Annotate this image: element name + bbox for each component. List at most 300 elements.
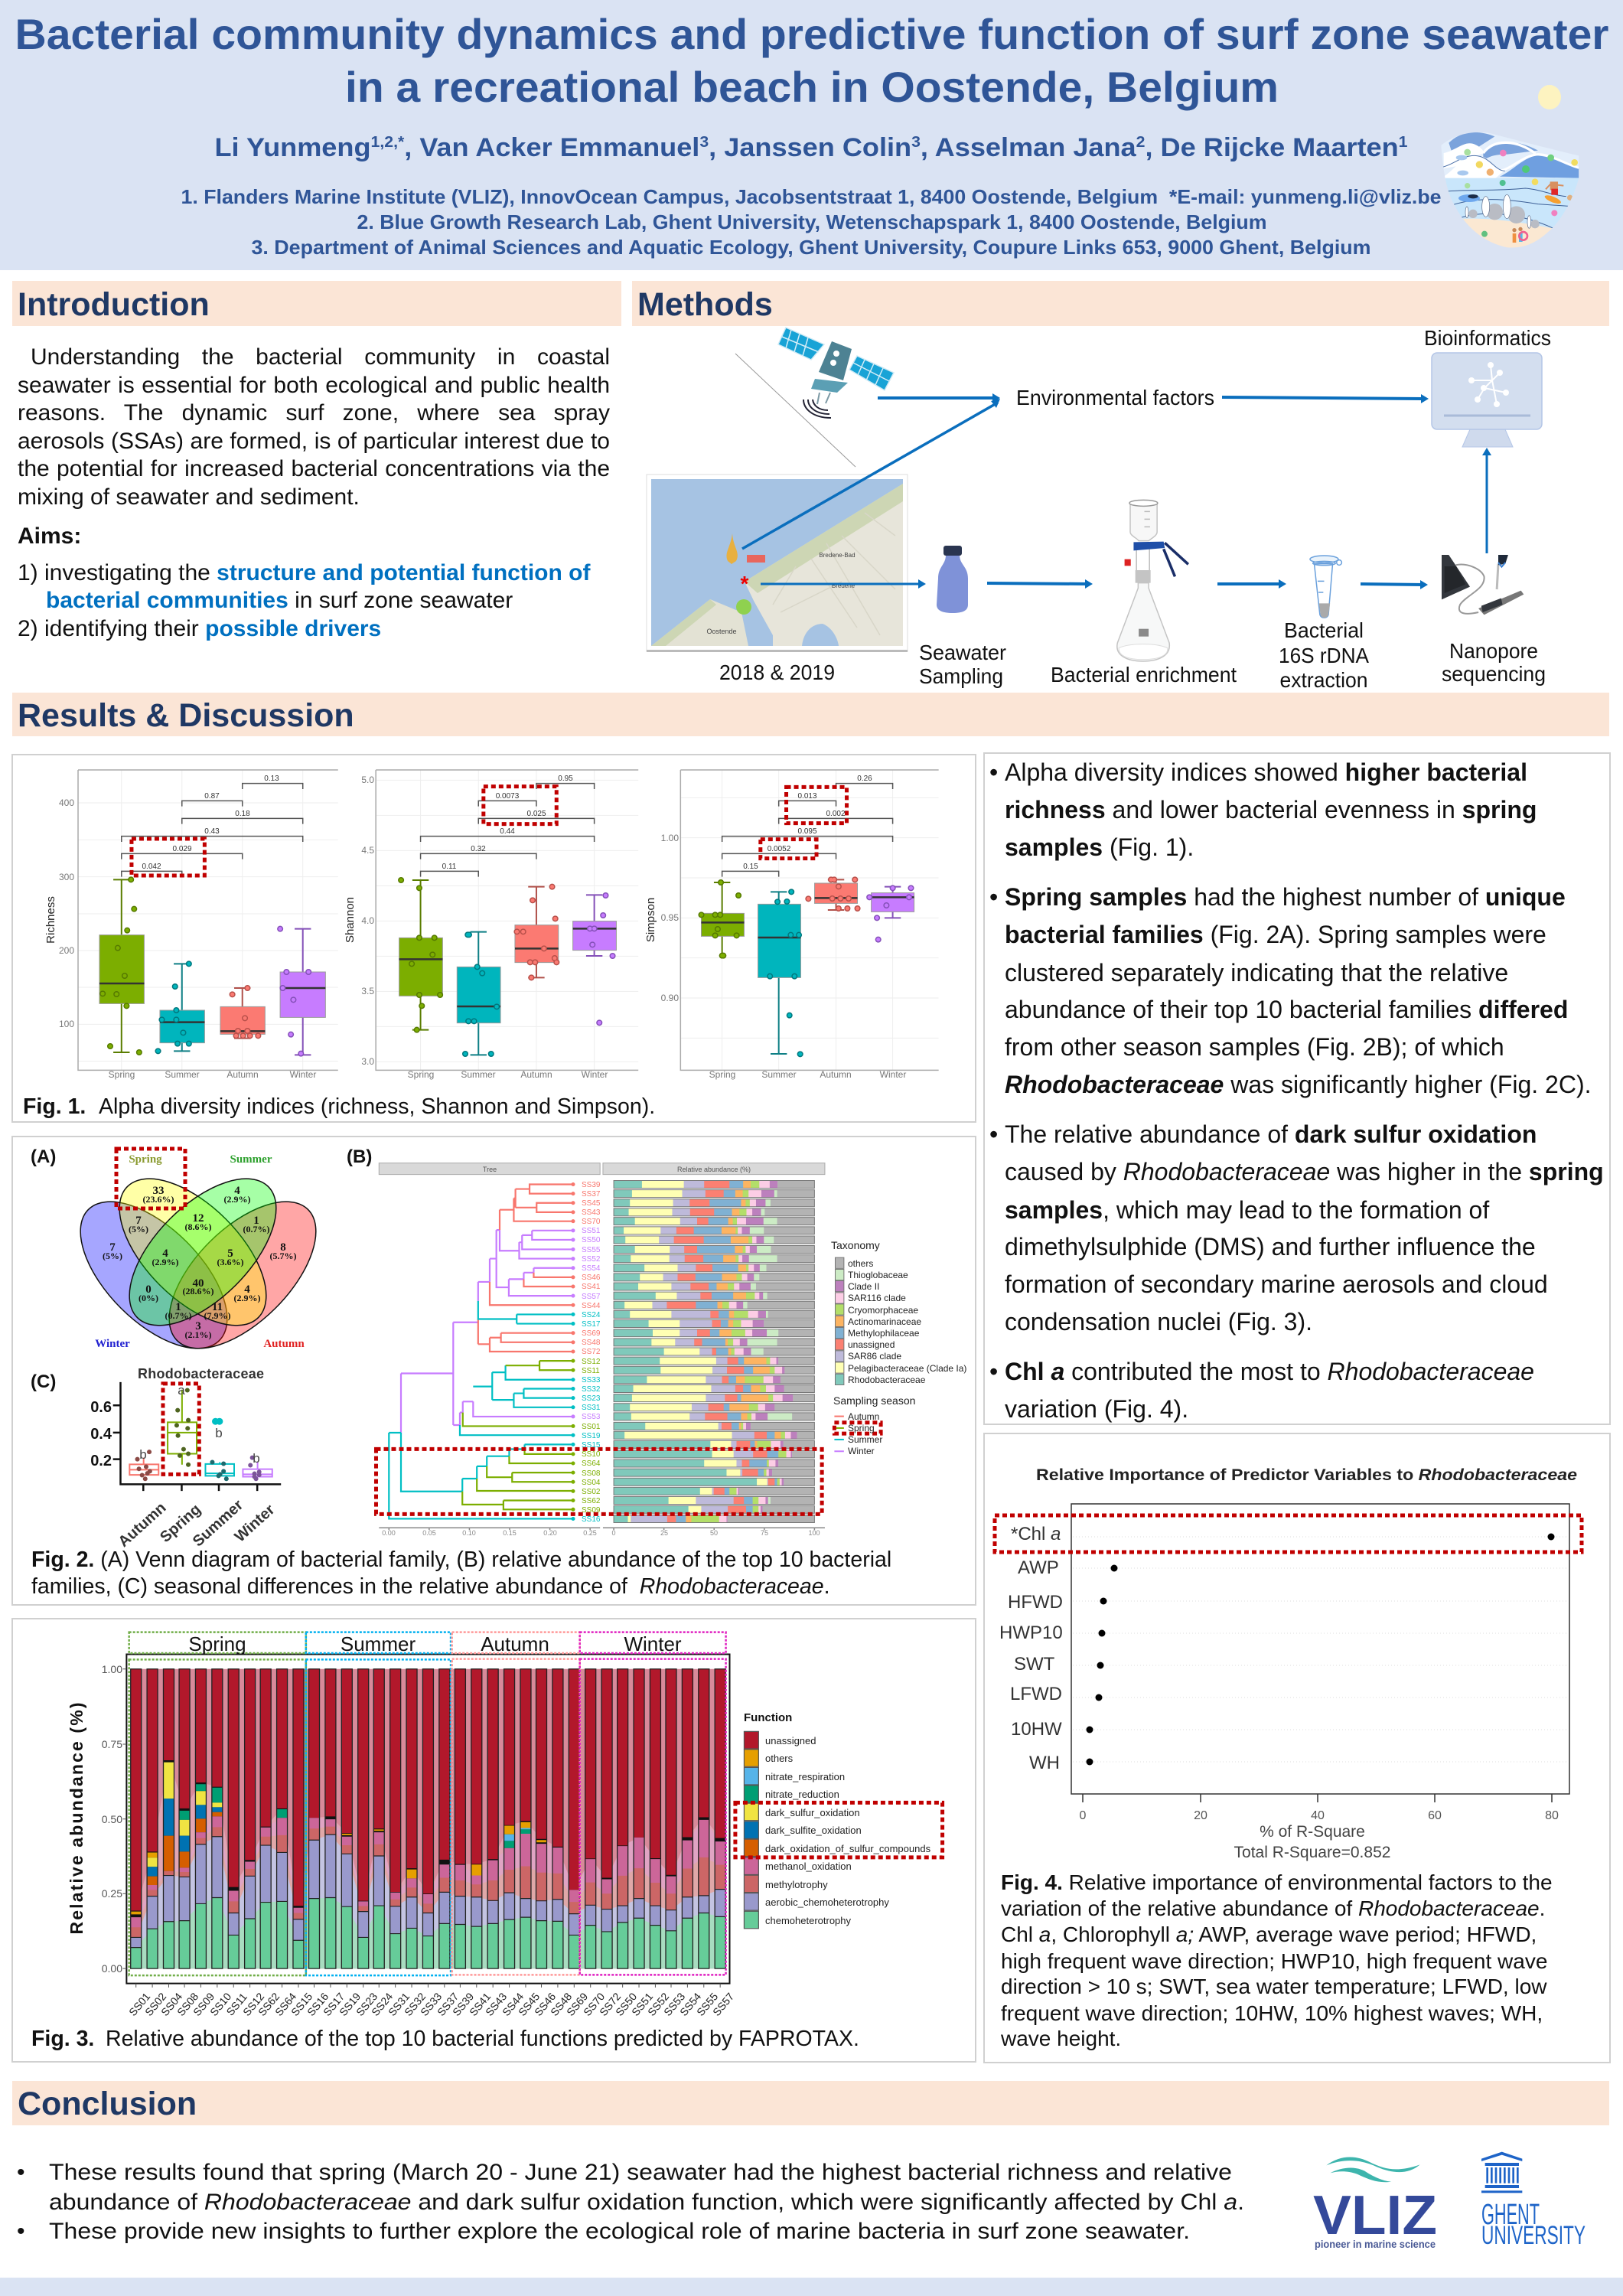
- caption figure 4: wave height.: [1000, 2027, 1121, 2050]
- icon: satellite: [778, 328, 894, 418]
- p-value labels: 0.26: [857, 775, 872, 783]
- axis tick labels: 3.5: [361, 986, 374, 996]
- dendrogram and stacked bars: SS19: [582, 1432, 601, 1440]
- p-value labels: 0.095: [797, 827, 817, 836]
- season labels: [188, 1632, 682, 1655]
- axis tick labels: 400: [59, 797, 74, 808]
- sample labels: SS33: [418, 1990, 444, 2018]
- axis tick labels: Spring: [408, 1069, 434, 1080]
- venn diagram: (5%): [129, 1224, 148, 1234]
- p-value labels: 0.025: [526, 810, 546, 818]
- heading: Introduction: Introduction: [18, 286, 210, 323]
- methods diagram: [647, 326, 1551, 692]
- label: environmental factors: Environmental factors: [1016, 386, 1214, 409]
- label: DNA extraction: 16S rDNA: [1279, 644, 1369, 667]
- dendrogram and stacked bars: SS72: [582, 1348, 601, 1356]
- p-value labels: 0.042: [142, 863, 161, 871]
- caption figure 2: families, (C) seasonal differences in the relative abundance of Rhodobacteraceae.: [31, 1574, 830, 1599]
- authors: 1: [1399, 134, 1408, 151]
- boxplots: [78, 770, 939, 1070]
- label: seawater sampling: [919, 641, 1006, 688]
- axis tick labels: [59, 775, 906, 1080]
- sample labels: SS69: [564, 1990, 590, 2018]
- label: seawater sampling: Sampling: [919, 664, 1003, 688]
- p-value labels: 0.95: [558, 775, 573, 783]
- arrow: map to environmental factors: [742, 399, 1000, 549]
- label: 2018 and 2019: 2018 & 2019: [719, 660, 835, 684]
- dendrogram and stacked bars: 0.20: [543, 1529, 557, 1537]
- sample labels: SS51: [629, 1990, 655, 2018]
- logo: Ghent University: [1481, 2152, 1586, 2250]
- p-value labels: 0.87: [204, 792, 220, 801]
- sample labels: SS31: [386, 1990, 412, 2018]
- legend: taxonomy and season: Thioglobaceae: [848, 1270, 908, 1280]
- legend: function: unassigned: [765, 1735, 816, 1746]
- authors: , De Rijcke Maarten: [1145, 133, 1399, 162]
- arrows: [761, 393, 1491, 589]
- sample labels: SS57: [710, 1990, 736, 2018]
- aims text: 2) identifying their possible drivers: [18, 616, 381, 641]
- dendrogram and stacked bars: SS57: [582, 1293, 601, 1301]
- conclusion bullets: •: [17, 2160, 25, 2185]
- dendrogram and stacked bars: SS15: [582, 1441, 601, 1450]
- dendrogram and stacked bars: 25: [660, 1529, 668, 1537]
- season labels: Autumn: [481, 1632, 549, 1655]
- panel: right discussion text: abundance of their top 10 bacterial families differed: [1005, 996, 1568, 1023]
- icon: nanopore device: [1442, 555, 1524, 615]
- sample labels: SS54: [677, 1990, 703, 2018]
- dendrogram and stacked bars: SS51: [582, 1227, 601, 1235]
- venn diagram: [55, 1149, 341, 1374]
- dendrogram and stacked bars: [376, 1163, 966, 1537]
- panel label B: (B): [347, 1146, 372, 1167]
- caption figure 4: [1000, 1870, 1553, 2050]
- axis tick labels: 3.0: [361, 1056, 374, 1067]
- dot chart: 20: [1194, 1809, 1207, 1822]
- dendrogram and stacked bars: SS64: [582, 1459, 601, 1468]
- legend: taxonomy and season: others: [848, 1258, 873, 1269]
- label: DNA extraction: Bacterial: [1284, 618, 1364, 642]
- sample labels: SS12: [240, 1990, 266, 2018]
- legend: taxonomy and season: Winter: [848, 1446, 875, 1456]
- legend: function: Function: [744, 1711, 792, 1724]
- dendrogram and stacked bars: SS54: [582, 1264, 601, 1273]
- panel: right discussion text: caused by Rhodobacteraceae was higher in the spring: [1005, 1158, 1604, 1186]
- footer band: [0, 2278, 1623, 2296]
- axis tick labels: Autumn: [520, 1069, 552, 1080]
- authors: Li Yunmeng: [214, 133, 362, 162]
- legend: taxonomy and season: [831, 1239, 966, 1456]
- dendrogram and stacked bars: SS55: [582, 1246, 601, 1254]
- label: bacterial enrichment: Bacterial enrichment: [1051, 663, 1237, 687]
- legend: taxonomy and season: Summer: [848, 1434, 882, 1445]
- sample labels: SS23: [354, 1990, 380, 2018]
- dendrogram and stacked bars: SS39: [582, 1181, 601, 1189]
- legend: function: nitrate_reduction: [765, 1789, 839, 1800]
- caption figure 4: Chl a, Chlorophyll a; AWP, average wave period; HFWD,: [1001, 1923, 1537, 1946]
- sample labels: SS17: [321, 1990, 347, 2018]
- authors: , Van Acker Emmanuel: [404, 133, 699, 162]
- caption figure 4: high frequent wave direction; HWP10, high frequent wave: [1001, 1949, 1547, 1973]
- axis tick labels: Spring: [109, 1069, 135, 1080]
- legend: taxonomy and season: Clade II: [848, 1281, 879, 1292]
- sample labels: SS64: [272, 1990, 298, 2018]
- legend: taxonomy and season: Actinomarinaceae: [848, 1316, 921, 1327]
- y axis: 0.50: [102, 1813, 122, 1825]
- axis tick labels: Winter: [582, 1069, 608, 1080]
- venn diagram: 0: [145, 1283, 152, 1296]
- Rhodobacteraceae boxplot: 0.4: [90, 1426, 112, 1443]
- sample labels: SS62: [256, 1990, 282, 2018]
- caption figure 3: Relative abundance of the top 10 bacterial functions predicted by FAPROTAX.: [106, 2027, 859, 2051]
- dot chart: [995, 1504, 1582, 1861]
- sample labels: SS45: [516, 1990, 542, 2018]
- venn diagram: (8.6%): [185, 1221, 211, 1232]
- y axis: 1.00: [102, 1663, 122, 1675]
- p-value labels: 0.43: [204, 827, 220, 836]
- p-value labels: 0.15: [743, 863, 758, 871]
- Rhodobacteraceae boxplot: Autumn: [116, 1499, 169, 1551]
- season labels: Summer: [341, 1632, 416, 1655]
- icon: sun: [1538, 85, 1561, 109]
- Rhodobacteraceae boxplot: b: [253, 1451, 260, 1466]
- sample labels: SS19: [337, 1990, 363, 2018]
- axis tick labels: 4.5: [361, 845, 374, 856]
- caption figure 1: Fig. 1.: [23, 1094, 86, 1119]
- title: Bacterial community dynamics and predictive function of surf zone seawater: [15, 11, 1608, 58]
- axis titles: Shannon: [344, 897, 357, 943]
- dot chart: HFWD: [1008, 1592, 1063, 1613]
- dendrogram and stacked bars: 0.25: [583, 1529, 597, 1537]
- y axis: Relative abundance (%): [67, 1702, 86, 1935]
- chart title: Relative Importance of Predictor Variables to Rhodobacteraceae: [1036, 1466, 1577, 1484]
- p-value labels: 0.11: [442, 863, 457, 871]
- conclusion bullets: These provide new insights to further explore the ecological role of marine bacteria in surf zone seawater.: [49, 2219, 1190, 2244]
- axis tick labels: Summer: [761, 1069, 797, 1080]
- icon: tube: [1310, 556, 1341, 618]
- dendrogram and stacked bars: 50: [710, 1529, 718, 1537]
- label: nanopore sequencing: [1442, 639, 1546, 686]
- logo: VLIZ: [1313, 2157, 1437, 2250]
- dendrogram and stacked bars: SS16: [582, 1515, 601, 1524]
- heading: Introduction: [12, 281, 621, 326]
- panel: right discussion text: condensation nuclei (Fig. 3).: [1005, 1308, 1312, 1336]
- sample labels: SS48: [548, 1990, 574, 2018]
- legend: taxonomy and season: Pelagibacteraceae (Clade Ia): [848, 1363, 966, 1374]
- dendrogram and stacked bars: SS53: [582, 1413, 601, 1421]
- panel: right discussion text: samples, which may lead to the formation of: [1005, 1196, 1489, 1224]
- dendrogram and stacked bars: SS02: [582, 1488, 601, 1496]
- sample labels: SS52: [645, 1990, 671, 2018]
- venn diagram: (7.9%): [204, 1310, 231, 1321]
- panel: right discussion text: from other season samples (Fig. 2B); of which: [1005, 1033, 1504, 1061]
- Rhodobacteraceae boxplot: [90, 1366, 281, 1551]
- Rhodobacteraceae boxplot: Winter: [232, 1501, 279, 1545]
- panel: right discussion text: dimethylsulphide (DMS) and further influence the: [1005, 1233, 1536, 1261]
- p-value labels: 0.13: [264, 775, 279, 783]
- caption figure 2: [31, 1548, 891, 1599]
- sample labels: SS41: [467, 1990, 493, 2018]
- Rhodobacteraceae boxplot: b: [215, 1426, 223, 1440]
- dendrogram and stacked bars: SS24: [582, 1311, 601, 1319]
- legend: taxonomy and season: Cryomorphaceae: [848, 1305, 918, 1316]
- panel: figure 2: [12, 1137, 976, 1605]
- Rhodobacteraceae boxplot: Summer: [190, 1496, 246, 1550]
- venn diagram: (2.9%): [234, 1293, 260, 1303]
- axis tick labels: 5.0: [361, 775, 374, 785]
- axis tick labels: 200: [59, 945, 74, 956]
- axis tick labels: Autumn: [820, 1069, 852, 1080]
- legend: taxonomy and season: Autumn: [848, 1411, 879, 1422]
- venn diagram: 7: [135, 1215, 142, 1227]
- dendrogram and stacked bars: SS52: [582, 1255, 601, 1264]
- Rhodobacteraceae boxplot: 0.2: [90, 1453, 112, 1469]
- legend: function: [744, 1711, 931, 1926]
- Rhodobacteraceae boxplot: a: [178, 1383, 185, 1397]
- dot chart: LFWD: [1010, 1684, 1062, 1704]
- caption figure 2: Fig. 2. (A) Venn diagram of bacterial family, (B) relative abundance of the top 10 bacterial: [31, 1548, 891, 1572]
- affiliations: 3. Department of Animal Sciences and Aquatic Ecology, Ghent University, Coupure Links 653, 9000 Ghent, Belgium: [251, 236, 1371, 259]
- caption figure 4: frequent wave direction; 10HW, 10% highest waves; WH,: [1001, 2001, 1543, 2025]
- dendrogram and stacked bars: SS44: [582, 1302, 601, 1310]
- dot chart: 10HW: [1011, 1719, 1062, 1740]
- axis tick labels: 300: [59, 872, 74, 882]
- axis tick labels: Spring: [709, 1069, 735, 1080]
- dendrogram and stacked bars: SS23: [582, 1394, 601, 1403]
- sample labels: SS46: [532, 1990, 558, 2018]
- dot chart: 80: [1545, 1809, 1559, 1822]
- axis tick labels: 100: [59, 1019, 74, 1029]
- panel: right discussion text: The relative abundance of dark sulfur oxidation: [1005, 1120, 1537, 1148]
- legend: taxonomy and season: Methylophilaceae: [848, 1328, 920, 1339]
- p-value labels: 0.18: [235, 810, 250, 818]
- dendrogram and stacked bars: 0.05: [422, 1529, 436, 1537]
- dendrogram and stacked bars: SS62: [582, 1497, 601, 1505]
- map of sampling site: [647, 475, 908, 652]
- sample labels: SS50: [613, 1990, 639, 2018]
- venn diagram: 40: [193, 1277, 204, 1290]
- dendrogram and stacked bars: Tree: [483, 1166, 497, 1173]
- legend: function: others: [765, 1753, 794, 1764]
- dendrogram and stacked bars: SS32: [582, 1385, 601, 1394]
- sample labels: SS43: [483, 1990, 509, 2018]
- venn diagram: 4: [162, 1247, 168, 1260]
- logo: Ghent University: GHENT: [1481, 2199, 1540, 2231]
- axis titles: [44, 896, 657, 944]
- sample labels: [126, 1990, 736, 2018]
- label: seawater sampling: Seawater: [919, 641, 1006, 664]
- label: DNA extraction: [1279, 618, 1369, 692]
- sample labels: SS44: [500, 1990, 526, 2018]
- dendrogram and stacked bars: SS09: [582, 1506, 601, 1515]
- axis tick labels: 0.90: [661, 993, 679, 1003]
- sample labels: SS02: [142, 1990, 168, 2018]
- panel label C: (C): [31, 1371, 56, 1392]
- dendrogram and stacked bars: SS11: [582, 1367, 600, 1375]
- stacked bars: [131, 1669, 725, 1968]
- panel: right discussion text: [984, 753, 1610, 1424]
- dendrogram and stacked bars: SS70: [582, 1218, 601, 1226]
- legend: function: aerobic_chemoheterotrophy: [765, 1896, 889, 1908]
- panel: right discussion text: richness and lower bacterial evenness in spring: [1005, 796, 1537, 823]
- sample labels: SS15: [288, 1990, 314, 2018]
- dot chart: 60: [1428, 1809, 1442, 1822]
- venn diagram: (2.9%): [152, 1257, 179, 1267]
- panel: figure 1 alpha diversity: [12, 755, 976, 1122]
- map of sampling site: *: [741, 572, 749, 595]
- panel: right discussion text: clustered separately indicating that the relative: [1005, 959, 1508, 987]
- conclusion bullets: •: [17, 2219, 25, 2244]
- panel: right discussion text: •: [989, 1358, 998, 1385]
- axis tick labels: 4.0: [361, 915, 374, 926]
- dendrogram and stacked bars: SS46: [582, 1274, 601, 1282]
- axis tick labels: Autumn: [227, 1069, 259, 1080]
- legend: taxonomy and season: Taxonomy: [831, 1239, 880, 1251]
- sample labels: SS53: [661, 1990, 687, 2018]
- sample labels: SS55: [694, 1990, 720, 2018]
- dendrogram and stacked bars: SS04: [582, 1479, 601, 1487]
- dot chart: 40: [1311, 1809, 1325, 1822]
- legend: taxonomy and season: unassigned: [848, 1339, 895, 1350]
- venn diagram: (23.6%): [142, 1194, 174, 1205]
- aims text: 1) investigating the structure and potential function of: [18, 560, 591, 585]
- legend: function: dark_sulfur_oxidation: [765, 1807, 860, 1818]
- legend: function: nitrate_respiration: [765, 1771, 845, 1782]
- venn diagram: Autumn: [263, 1338, 305, 1350]
- sample labels: SS10: [207, 1990, 233, 2018]
- Rhodobacteraceae boxplot: Rhodobacteraceae: [138, 1366, 264, 1381]
- venn diagram: (3.6%): [217, 1257, 243, 1267]
- panel: right discussion text: bacterial families (Fig. 2A). Spring samples were: [1005, 921, 1546, 948]
- p-value labels: 0.0073: [496, 792, 520, 801]
- venn diagram: 3: [195, 1320, 201, 1332]
- p-value labels: 0.0052: [768, 845, 791, 853]
- affiliations: 1. Flanders Marine Institute (VLIZ), InnovOcean Campus, Jacobsentstraat 1, 8400 Oostende, Belgium *E-mail: yunmeng.li@vliz.be: [181, 185, 1442, 208]
- dendrogram and stacked bars: 0.00: [382, 1529, 396, 1537]
- icon: beach illustration: [1439, 128, 1582, 250]
- logo: VLIZ: pioneer in marine science: [1315, 2238, 1436, 2250]
- map of sampling site: Oostende: [706, 628, 737, 635]
- venn diagram: (5%): [103, 1251, 122, 1261]
- venn diagram: (0.7%): [243, 1224, 269, 1234]
- dot chart: 0: [1080, 1809, 1087, 1822]
- affiliations: 2. Blue Growth Research Lab, Ghent University, Wetenschapspark 1, 8400 Oostende, Belgium: [357, 210, 1267, 233]
- dendrogram and stacked bars: SS48: [582, 1339, 601, 1347]
- authors: 3: [911, 134, 921, 151]
- venn diagram: (0%): [139, 1293, 158, 1303]
- heading: Conclusion: Conclusion: [18, 2086, 197, 2122]
- venn diagram: (0.7%): [165, 1310, 191, 1321]
- Rhodobacteraceae boxplot: b: [139, 1447, 147, 1462]
- authors: , Asselman Jana: [921, 133, 1137, 162]
- venn diagram: 33: [153, 1185, 164, 1197]
- map of sampling site: Bredene: [832, 582, 855, 589]
- dendrogram and stacked bars: 100: [808, 1529, 820, 1537]
- dot chart: % of R-Square: [1260, 1823, 1365, 1841]
- map of sampling site: Bredene-Bad: [819, 552, 855, 559]
- venn diagram: 4: [244, 1283, 250, 1296]
- heading: Results and Discussion: [12, 693, 1609, 736]
- axis titles: Richness: [44, 896, 57, 944]
- authors: 3: [699, 134, 709, 151]
- dendrogram and stacked bars: SS33: [582, 1376, 601, 1384]
- p-value labels: [142, 775, 872, 871]
- dendrogram and stacked bars: SS08: [582, 1469, 601, 1478]
- label: nanopore sequencing: sequencing: [1442, 662, 1546, 686]
- p-value labels: 0.44: [500, 827, 515, 836]
- label: DNA extraction: extraction: [1279, 668, 1368, 692]
- panel: right discussion text: Alpha diversity indices showed higher bacterial: [1005, 758, 1527, 786]
- dendrogram and stacked bars: SS31: [582, 1404, 601, 1412]
- dendrogram and stacked bars: SS12: [582, 1358, 601, 1366]
- heading: Methods: Methods: [637, 286, 773, 323]
- y axis: [67, 1663, 122, 1975]
- venn diagram: 4: [234, 1185, 240, 1197]
- y axis: 0.25: [102, 1887, 122, 1900]
- axis tick labels: Winter: [290, 1069, 316, 1080]
- legend: function: methanol_oxidation: [765, 1861, 852, 1872]
- panel: right discussion text: Spring samples had the highest number of unique: [1005, 883, 1566, 911]
- panel: right discussion text: •: [989, 883, 998, 911]
- logo: VLIZ: VLIZ: [1313, 2185, 1437, 2246]
- caption figure 1: Alpha diversity indices (richness, Shannon and Simpson).: [99, 1094, 655, 1119]
- venn diagram: Spring: [129, 1153, 162, 1166]
- dendrogram and stacked bars: SS01: [582, 1423, 601, 1431]
- sample labels: SS37: [435, 1990, 461, 2018]
- dot chart: Total R-Square=0.852: [1234, 1844, 1390, 1861]
- y axis: 0.00: [102, 1962, 122, 1975]
- axis titles: Simpson: [644, 898, 657, 942]
- heading: Conclusion: [12, 2081, 1609, 2125]
- dendrogram and stacked bars: SS37: [582, 1190, 601, 1199]
- heading: Methods: [632, 281, 1609, 326]
- legend: taxonomy and season: SAR86 clade: [848, 1351, 901, 1362]
- legend: function: chemoheterotrophy: [765, 1915, 852, 1926]
- legend: function: methylotrophy: [765, 1879, 828, 1890]
- dendrogram and stacked bars: SS41: [582, 1283, 601, 1291]
- venn diagram: 11: [212, 1301, 223, 1313]
- dendrogram and stacked bars: Relative abundance (%): [677, 1166, 751, 1173]
- panel: right discussion text: •: [989, 758, 998, 786]
- legend: function: dark_sulfite_oxidation: [765, 1825, 862, 1836]
- axis tick labels: Summer: [461, 1069, 496, 1080]
- label: nanopore sequencing: Nanopore: [1449, 639, 1538, 663]
- authors: 2: [1136, 134, 1145, 151]
- dendrogram and stacked bars: SS43: [582, 1208, 601, 1217]
- venn diagram: 7: [109, 1241, 116, 1254]
- sample labels: SS01: [126, 1990, 152, 2018]
- caption figure 4: direction > 10 s; SWT, sea water temperature; LFWD, low: [1001, 1975, 1547, 1998]
- conclusion bullets: [17, 2160, 1244, 2244]
- panel: right discussion text: formation of secondary marine aerosols and cloud: [1005, 1270, 1548, 1298]
- header band: [0, 0, 1623, 270]
- sample labels: SS72: [597, 1990, 623, 2018]
- p-value labels: 0.029: [172, 845, 192, 853]
- panel: right discussion text: Rhodobacteraceae was significantly higher (Fig. 2C).: [1005, 1071, 1592, 1098]
- sample labels: SS24: [369, 1990, 395, 2018]
- venn diagram: 12: [193, 1212, 204, 1225]
- venn diagram: (2.9%): [223, 1194, 251, 1205]
- venn diagram: Summer: [230, 1153, 272, 1166]
- aims text: bacterial communities in surf zone seawater: [46, 588, 513, 613]
- icon: filtration flask: [1117, 500, 1188, 661]
- p-value labels: 0.002: [826, 810, 846, 818]
- sample labels: SS39: [450, 1990, 476, 2018]
- venn diagram: (2.1%): [185, 1329, 211, 1340]
- caption figure 4: Fig. 4. Relative importance of environmental factors to the: [1001, 1870, 1553, 1894]
- dot chart: HWP10: [999, 1623, 1063, 1643]
- icon: monitor: [1432, 353, 1542, 447]
